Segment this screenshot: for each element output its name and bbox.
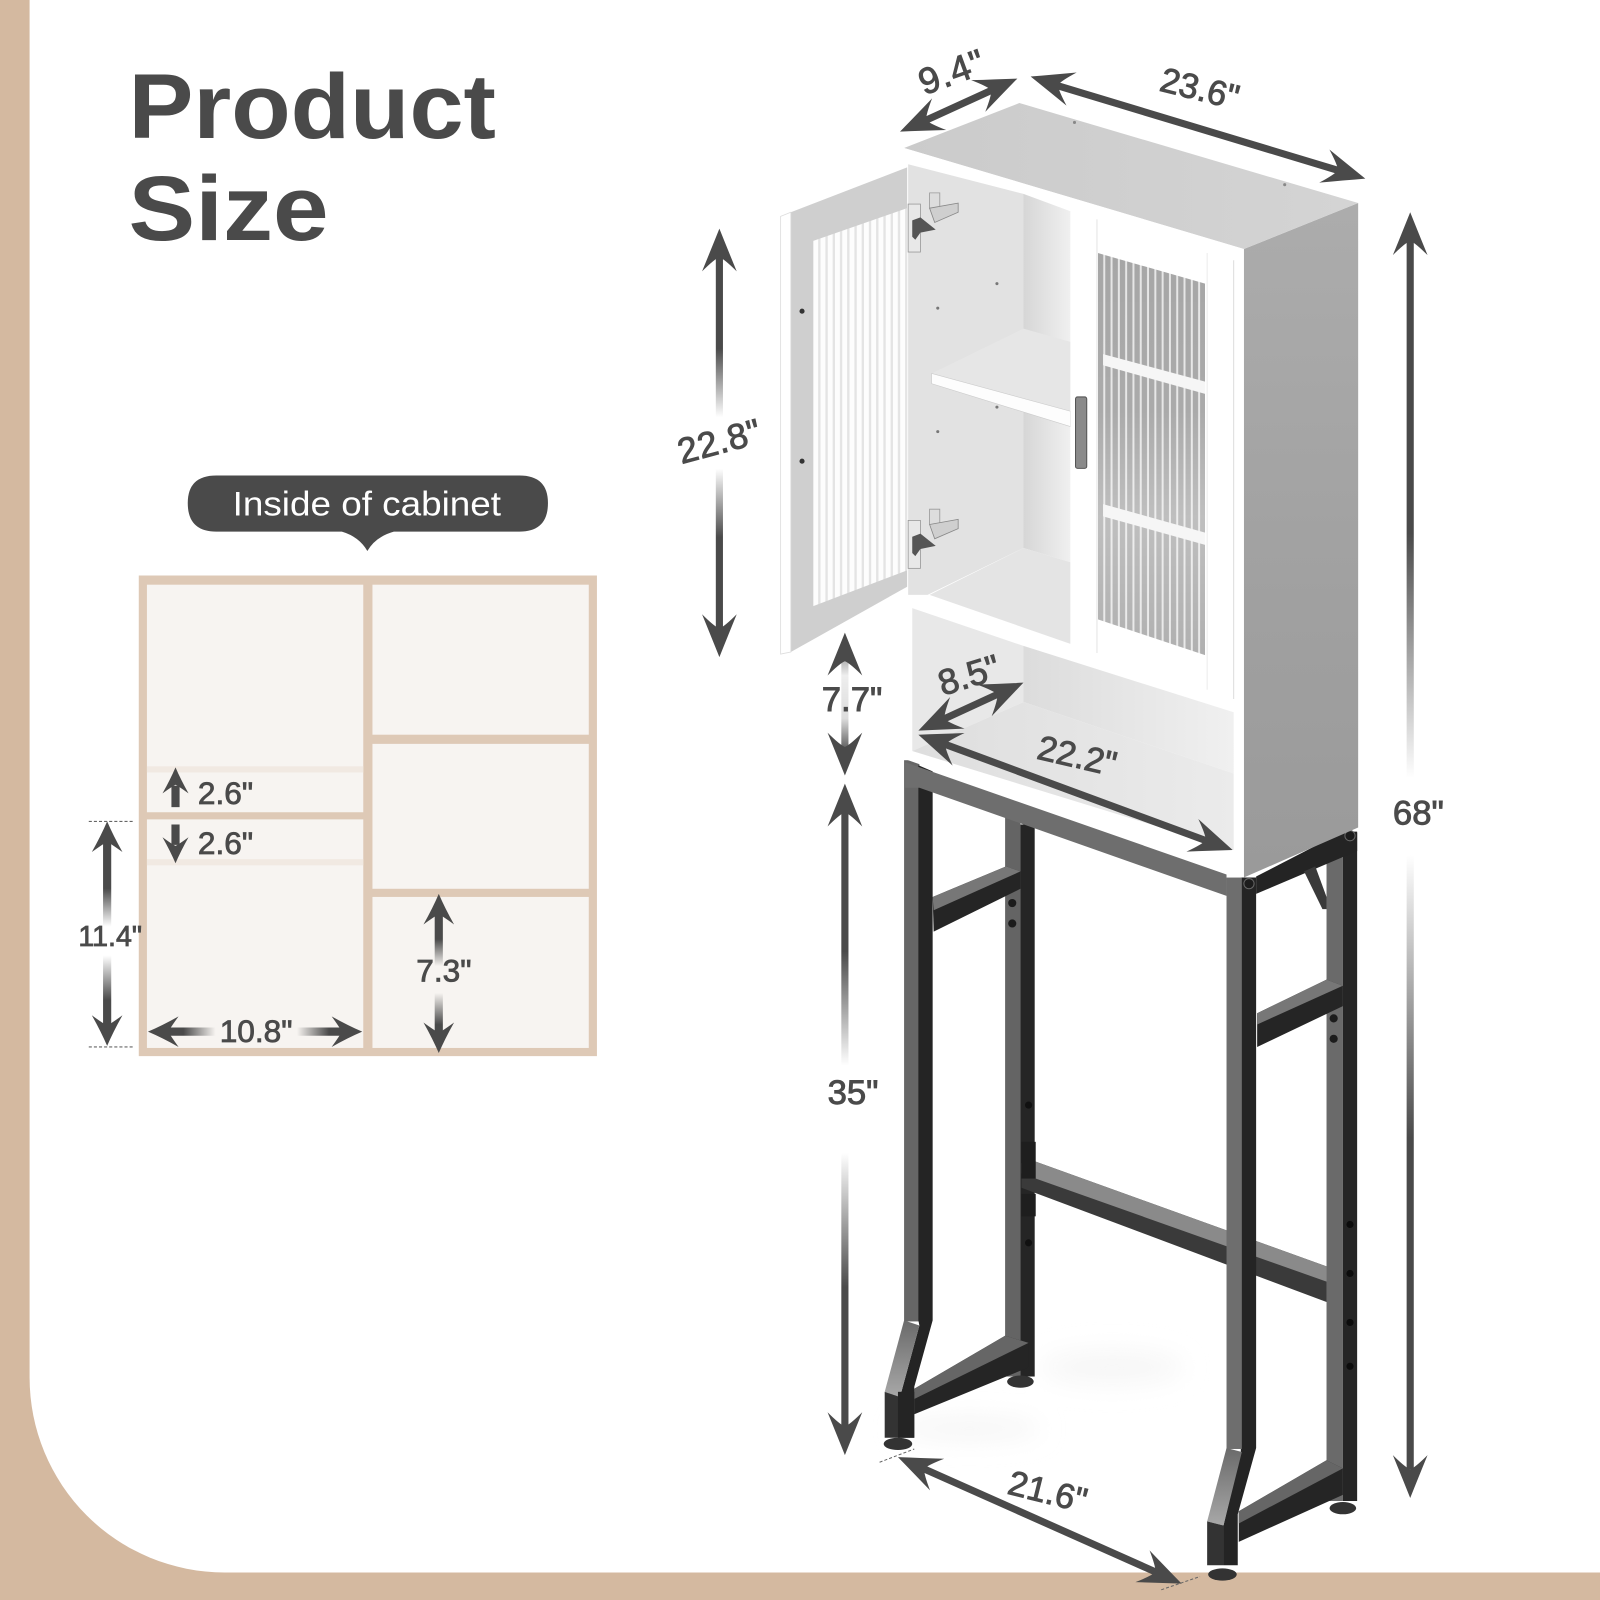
cabinet top <box>904 103 1358 249</box>
open left door <box>781 167 907 654</box>
soft floor shadows <box>898 1351 1184 1439</box>
dimension: width 23.6 <box>1026 60 1370 195</box>
top mounting holes <box>1073 121 1286 186</box>
right door <box>1070 211 1234 699</box>
dimension: total height 68: 68" <box>1393 794 1444 832</box>
left side lower brace <box>914 1336 1029 1414</box>
dimension: lower gap 2.6 <box>162 824 253 863</box>
dimension: inner depth 8.5: 8.5" <box>933 647 1005 703</box>
title <box>129 56 496 260</box>
cabinet side panel <box>1244 203 1358 878</box>
top frame rails <box>905 762 1357 909</box>
dimension: depth 9.4 <box>893 41 1024 147</box>
callout pill: inside of cabinet: Inside of cabinet <box>233 485 501 523</box>
upper compartment back wall <box>1023 194 1070 562</box>
dimension: stand height 35 <box>828 784 879 1455</box>
dimension: height 11.4 <box>78 821 142 1047</box>
fluted glass <box>1098 245 1206 663</box>
dimension: height 7.3: 7.3" <box>416 953 471 989</box>
dimension: door height 22.8: 22.8" <box>673 411 765 472</box>
cabinet interior diagram <box>139 576 597 1056</box>
dimension: width 23.6: 23.6" <box>1156 61 1243 117</box>
title: Product <box>129 56 496 158</box>
right front leg <box>1207 878 1256 1581</box>
cross bar <box>1021 1102 1327 1302</box>
dimension: stand width 21.6: 21.6" <box>1004 1464 1091 1520</box>
title: Size <box>129 158 329 260</box>
icon: lower hinge <box>908 509 958 568</box>
dimension: clearance 7.7 <box>822 633 882 776</box>
back right leg <box>1327 832 1357 1514</box>
panel: inside of cabinet <box>78 476 597 1056</box>
cabinet front carcass <box>904 148 1244 878</box>
dimension: lower gap 2.6: 2.6" <box>198 825 253 861</box>
dimension: inner width 22.2 <box>912 718 1239 866</box>
dimension: depth 9.4: 9.4" <box>913 41 991 103</box>
dimension: upper gap 2.6 <box>162 767 253 811</box>
dimension: height 11.4: 11.4" <box>78 921 142 953</box>
left front leg <box>884 760 933 1450</box>
back left leg <box>1005 816 1035 1388</box>
dimension: door height 22.8 <box>673 229 765 657</box>
door handle <box>1076 397 1087 468</box>
callout pill: inside of cabinet <box>188 476 548 551</box>
dimension: width 10.8: 10.8" <box>220 1013 293 1049</box>
dimension: stand height 35: 35" <box>828 1074 879 1112</box>
left side upper brace <box>933 866 1020 932</box>
lower open compartment <box>912 608 1234 850</box>
dimension: width 10.8 <box>148 1013 362 1049</box>
frame bolts <box>1008 831 1355 1370</box>
dimension: total height 68 <box>1393 212 1444 1498</box>
middle shelf <box>932 329 1070 427</box>
fluted glass <box>813 208 907 606</box>
dimension: height 7.3 <box>416 894 471 1053</box>
product: metal stand <box>884 760 1357 1581</box>
compartment floor <box>930 548 1070 644</box>
dimension: inner width 22.2: 22.2" <box>1034 729 1120 784</box>
right side upper brace <box>1257 980 1343 1047</box>
icon: upper hinge <box>908 193 958 252</box>
dimension: clearance 7.7: 7.7" <box>822 681 882 719</box>
dimension: inner depth 8.5 <box>911 647 1031 746</box>
right side lower brace <box>1239 1460 1343 1542</box>
upper compartment left wall <box>908 164 1023 595</box>
dimension: upper gap 2.6: 2.6" <box>198 775 253 811</box>
product: white cabinet <box>781 103 1358 878</box>
shelf pin holes <box>936 282 998 433</box>
dimension: stand width 21.6 <box>880 1441 1200 1600</box>
